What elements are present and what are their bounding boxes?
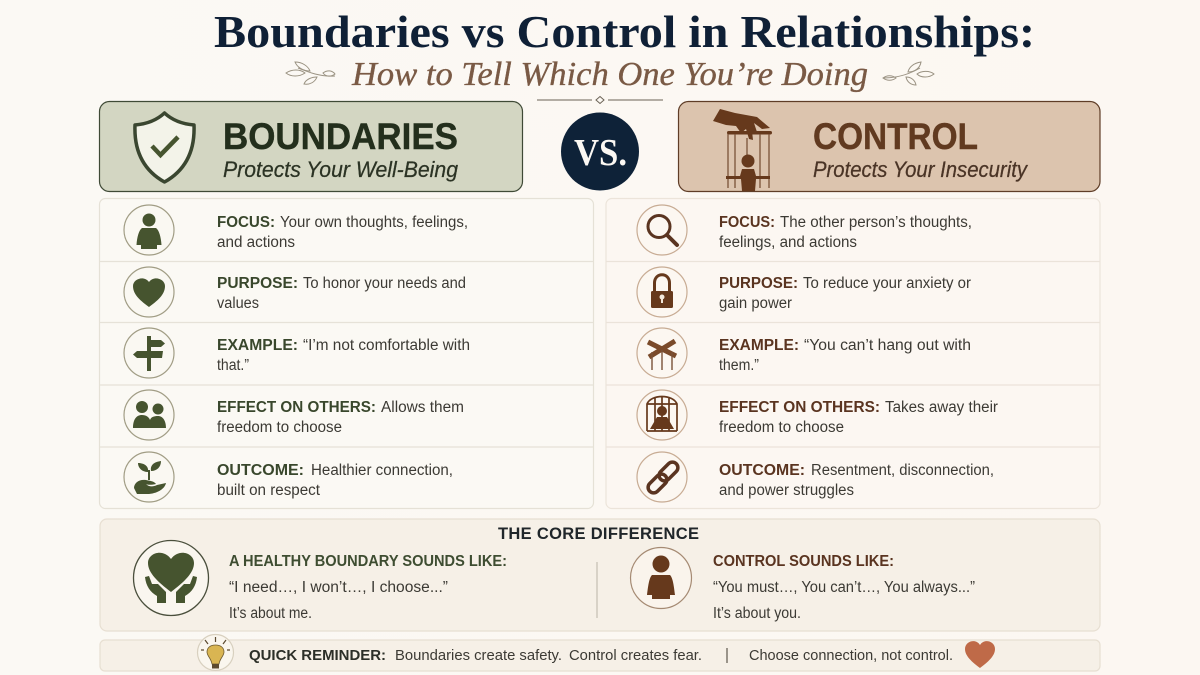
icon: puppet hand bbox=[713, 109, 772, 191]
row: example: that.” bbox=[217, 357, 249, 374]
icon: light bulb bbox=[198, 634, 234, 670]
icon: padlock bbox=[637, 267, 687, 317]
panel: control comparison table bbox=[606, 198, 1100, 508]
row: purpose: PURPOSE: bbox=[719, 275, 798, 292]
row: effect on others bbox=[124, 390, 464, 440]
row: example: “I’m not comfortable with bbox=[303, 337, 470, 354]
row: outcome: built on respect bbox=[217, 482, 321, 499]
row: effect on others: freedom to choose bbox=[719, 419, 844, 436]
badge: VS bbox=[561, 112, 639, 190]
row: example bbox=[637, 328, 971, 378]
icon: person in cage bbox=[637, 390, 687, 440]
icon: person bbox=[630, 548, 692, 608]
heading: boundaries: BOUNDARIES bbox=[223, 115, 458, 157]
row: focus: feelings, and actions bbox=[719, 234, 857, 251]
row: focus: The other person’s thoughts, bbox=[780, 214, 972, 231]
icon: shield with check bbox=[135, 113, 194, 182]
icon: person bbox=[124, 205, 174, 255]
icon: chain links bbox=[637, 452, 687, 502]
text: healthy boundary: A HEALTHY BOUNDARY SOUNDS LIKE: bbox=[229, 553, 507, 570]
panel: boundaries header bbox=[100, 102, 522, 192]
row: outcome bbox=[124, 452, 453, 502]
panel: quick reminder: QUICK REMINDER: bbox=[249, 647, 386, 664]
row: effect on others: EFFECT ON OTHERS: bbox=[719, 399, 880, 416]
row: effect on others bbox=[637, 390, 998, 440]
row: outcome: OUTCOME: bbox=[719, 462, 805, 479]
title: Boundaries vs Control in Relationships: bbox=[214, 6, 1035, 57]
row: outcome: Healthier connection, bbox=[311, 462, 453, 479]
row: outcome: OUTCOME: bbox=[217, 462, 304, 479]
subtitle: How to Tell Which One You’re Doing bbox=[351, 56, 868, 93]
row: purpose: values bbox=[217, 295, 259, 312]
row: example: EXAMPLE: bbox=[719, 337, 799, 354]
badge: VS: VS. bbox=[574, 132, 627, 174]
row: purpose: gain power bbox=[719, 295, 792, 312]
icon: heart bbox=[124, 267, 174, 317]
text: control sounds like: It’s about you. bbox=[713, 605, 801, 622]
row: purpose bbox=[124, 267, 466, 317]
panel: quick reminder bbox=[100, 634, 1100, 671]
row: outcome: Resentment, disconnection, bbox=[811, 462, 994, 479]
row: focus bbox=[124, 205, 468, 255]
panel: the core difference bbox=[100, 519, 1100, 631]
row: purpose: To honor your needs and bbox=[303, 275, 466, 292]
row: purpose bbox=[637, 267, 971, 317]
row: example: them.” bbox=[719, 357, 759, 374]
row: focus: FOCUS: bbox=[719, 214, 775, 231]
row: effect on others: Takes away their bbox=[885, 399, 998, 416]
row: example bbox=[124, 328, 470, 378]
icon: right leaf sprig bbox=[883, 62, 934, 85]
row: purpose: PURPOSE: bbox=[217, 275, 298, 292]
text: healthy boundary: It’s about me. bbox=[229, 605, 312, 622]
icon: sprout in hand bbox=[124, 452, 174, 502]
row: outcome bbox=[637, 452, 994, 502]
text: control sounds like: CONTROL SOUNDS LIKE: bbox=[713, 553, 894, 570]
row: effect on others: EFFECT ON OTHERS: bbox=[217, 399, 376, 416]
icon: signpost bbox=[124, 328, 174, 378]
row: example: EXAMPLE: bbox=[217, 337, 298, 354]
text: control sounds like: “You must…, You can’t…, You always...” bbox=[713, 579, 975, 596]
icon: puppet crossbars bbox=[637, 328, 687, 378]
row: effect on others: Allows them bbox=[381, 399, 464, 416]
icon: heart in hands bbox=[134, 540, 208, 616]
tagline: control: Protects Your Insecurity bbox=[813, 157, 1029, 182]
icon: left leaf sprig bbox=[286, 62, 335, 84]
row: focus: Your own thoughts, feelings, bbox=[280, 214, 468, 231]
text: healthy boundary bbox=[229, 553, 507, 622]
row: focus: FOCUS: bbox=[217, 214, 275, 231]
row: outcome: and power struggles bbox=[719, 482, 854, 499]
text: healthy boundary: “I need…, I won’t…, I choose...” bbox=[229, 579, 448, 596]
heading: control: CONTROL bbox=[813, 115, 978, 157]
tagline: boundaries: Protects Your Well-Being bbox=[223, 157, 459, 182]
row: purpose: To reduce your anxiety or bbox=[803, 275, 971, 292]
row: example: “You can’t hang out with bbox=[804, 337, 971, 354]
row: focus bbox=[637, 205, 972, 255]
row: effect on others: freedom to choose bbox=[217, 419, 342, 436]
panel: boundaries comparison table bbox=[100, 198, 594, 508]
panel: quick reminder: Boundaries create safety. bbox=[395, 648, 562, 664]
text: control sounds like bbox=[713, 553, 975, 622]
icon: terracotta heart bbox=[965, 641, 995, 668]
heading: the core difference: THE CORE DIFFERENCE bbox=[498, 525, 699, 543]
panel: quick reminder: Control creates fear. bbox=[569, 648, 702, 664]
panel: control header bbox=[678, 102, 1100, 192]
panel: quick reminder: Choose connection, not control. bbox=[749, 648, 953, 664]
divider ornament bbox=[537, 96, 663, 104]
icon: two people bbox=[124, 390, 174, 440]
icon: magnifying glass bbox=[637, 205, 687, 255]
row: focus: and actions bbox=[217, 234, 295, 251]
